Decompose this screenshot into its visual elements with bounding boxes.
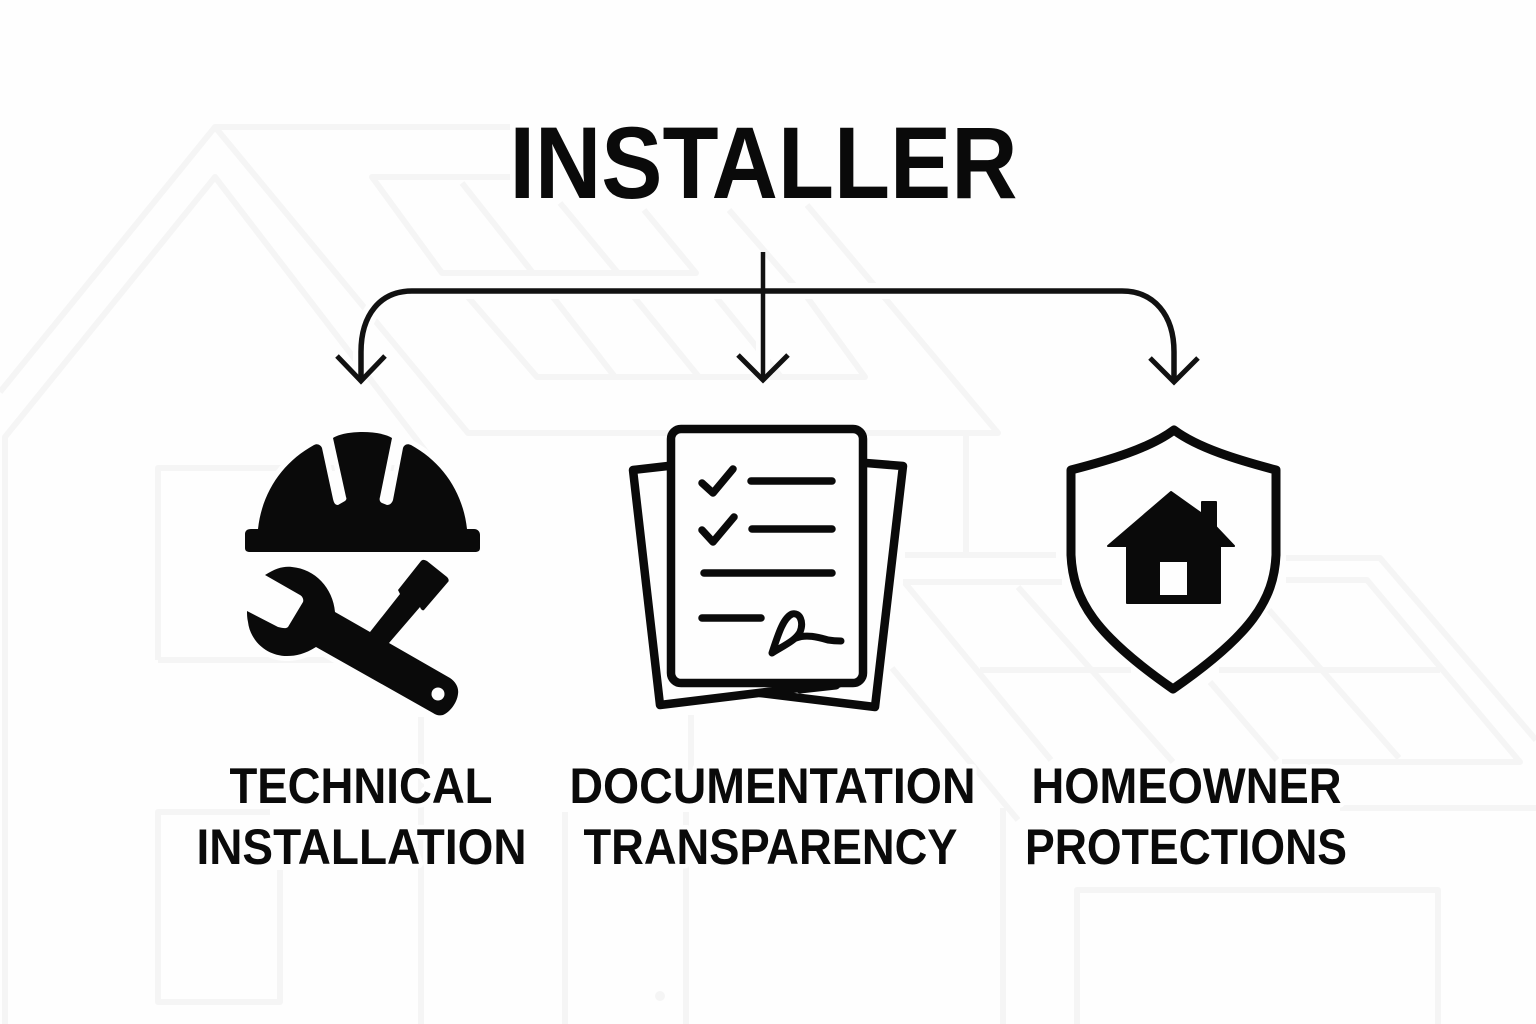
checkmarks [702,469,734,542]
icon: shield with house [1071,430,1276,689]
checklist lines [702,481,832,618]
arrows: installer to three pillars [337,252,1198,382]
wrench hole [432,688,444,700]
label: technical installation [196,758,526,875]
front sheet [671,429,863,683]
back sheets [633,466,903,707]
title: INSTALLER [510,106,1018,220]
signature [772,614,841,653]
label: documentation transparency: TRANSPARENCY [584,819,958,875]
label: technical installation: INSTALLATION [196,819,526,875]
icon: hard hat with wrench and screwdriver [245,432,480,715]
label: homeowner protections: HOMEOWNER [1032,758,1342,814]
house [1108,492,1234,603]
label: documentation transparency: DOCUMENTATION [570,758,976,814]
door [1160,562,1187,595]
hard hat [245,432,480,552]
wrench and screwdriver [247,560,458,715]
shield [1071,430,1276,689]
label: technical installation: TECHNICAL [230,758,492,814]
thick sheet overlap [800,685,836,689]
label: documentation transparency [570,758,976,875]
label: homeowner protections [1025,758,1347,875]
icon: documents with checklist and signature [633,429,903,707]
label: homeowner protections: PROTECTIONS [1025,819,1347,875]
